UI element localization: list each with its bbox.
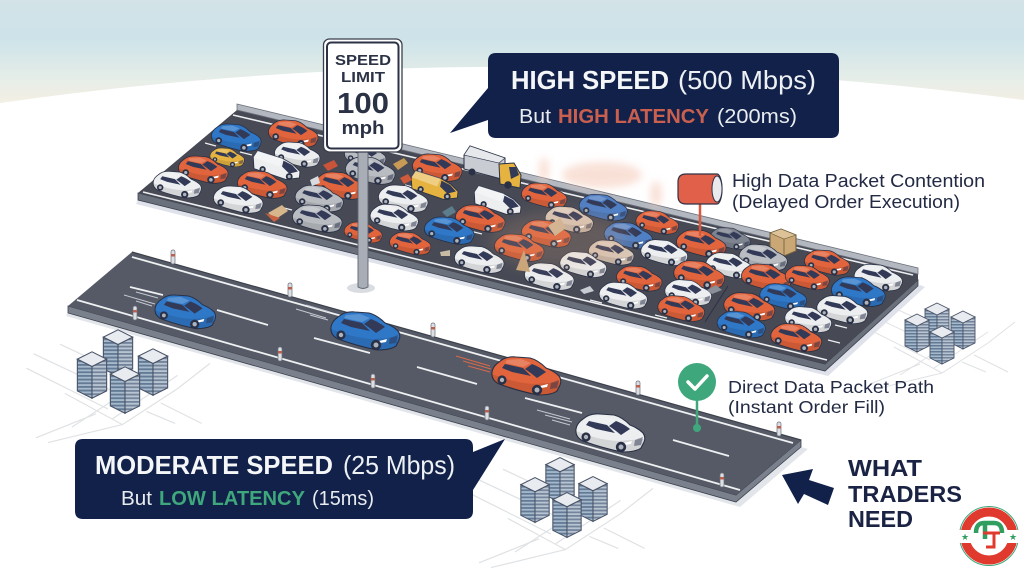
road haze — [490, 212, 630, 268]
sign text: SPEED — [335, 52, 391, 69]
road slab side — [138, 193, 918, 371]
logo badge — [959, 506, 1019, 566]
callout: high speed: But — [519, 106, 551, 128]
callout: moderate speed: MODERATE SPEED — [95, 450, 333, 480]
heading: what traders need — [848, 455, 962, 532]
road shadow — [66, 312, 808, 507]
callout: high speed: HIGH LATENCY — [558, 106, 710, 128]
congested highway — [136, 104, 925, 376]
server grid: right — [862, 306, 1015, 388]
label: direct path — [728, 377, 934, 417]
cardboard box — [770, 229, 796, 256]
debris on road — [265, 158, 728, 322]
smoke plumes — [539, 157, 662, 207]
bollards — [133, 250, 781, 487]
guardrail — [237, 104, 918, 274]
sign text: LIMIT — [341, 69, 385, 86]
label: direct path: Direct Data Packet Path — [728, 377, 934, 397]
road surface — [138, 110, 918, 364]
gridlocked cars — [153, 120, 902, 352]
callout: high speed: HIGH SPEED — [511, 65, 669, 95]
heading: what traders need: WHAT — [848, 455, 923, 481]
server grid: bottom — [469, 469, 653, 568]
sign text: mph — [342, 118, 384, 138]
pole shadow — [347, 283, 375, 293]
heading: what traders need: NEED — [848, 506, 913, 532]
sign pole — [358, 152, 368, 288]
callout: high speed: (500 Mbps) — [678, 65, 816, 95]
moving cars — [155, 295, 216, 329]
speed limit sign — [324, 39, 402, 288]
road slab side — [68, 306, 801, 502]
callout: high speed: (200ms) — [717, 106, 797, 128]
road surface — [68, 252, 801, 495]
icon: servers right — [905, 303, 975, 364]
icon: servers left — [77, 330, 168, 413]
callout: moderate speed: (25 Mbps) — [343, 450, 455, 480]
sign text: 100 — [337, 88, 389, 120]
logo badge: ★ — [1009, 532, 1017, 542]
heading: what traders need: TRADERS — [848, 481, 962, 507]
label: contention: (Delayed Order Execution) — [732, 192, 960, 212]
background sky — [0, 0, 1024, 110]
road shadow — [136, 200, 925, 376]
callout: high speed — [450, 53, 839, 138]
box truck — [464, 146, 521, 189]
callout: moderate speed: (15ms) — [312, 488, 374, 510]
label: contention — [732, 171, 985, 212]
callout: moderate speed — [75, 439, 505, 519]
label: direct path: (Instant Order Fill) — [728, 397, 885, 417]
arrow pointing to clear road — [782, 469, 834, 505]
sign board — [324, 39, 402, 152]
clear highway — [66, 250, 808, 507]
callout: moderate speed: But — [121, 488, 152, 510]
callout: moderate speed: LOW LATENCY — [159, 488, 306, 510]
label: contention: High Data Packet Contention — [732, 171, 985, 191]
icon: red packet pipe with label stem — [678, 174, 722, 236]
sign text — [335, 52, 391, 138]
top edge — [132, 252, 801, 440]
icon: servers bottom — [521, 458, 607, 537]
lane lines — [77, 257, 793, 490]
motion trails — [124, 292, 572, 425]
server grid: left — [26, 344, 210, 443]
icon: green check pin — [678, 363, 716, 432]
lane lines — [143, 115, 913, 360]
logo badge: ★ — [961, 532, 969, 542]
